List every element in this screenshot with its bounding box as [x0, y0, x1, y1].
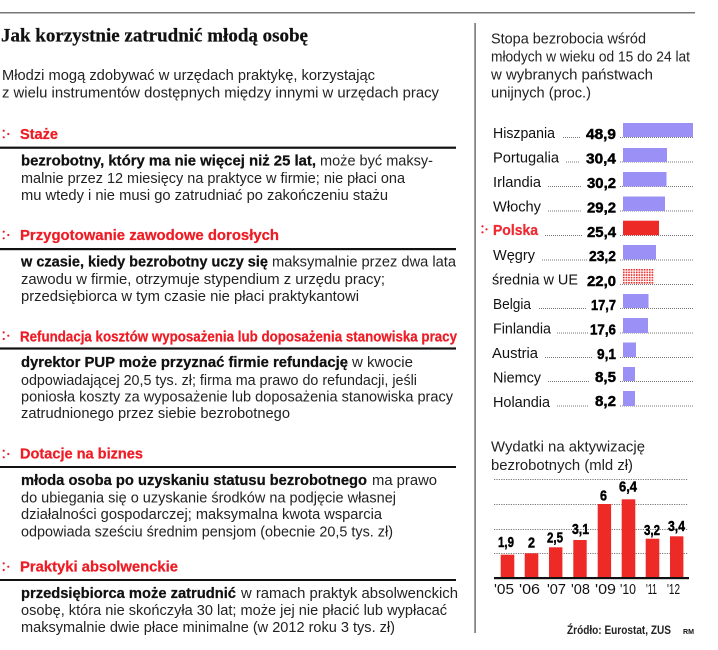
text block: Staże: malnie przez 12 miesięcy na praktyce w firmie; nie płaci ona [21, 171, 406, 187]
bar: 2007: 2,5 [547, 530, 563, 546]
row: średnia w UE [492, 269, 694, 290]
text block: Refundacja: poniosła koszty za wyposażenie lub doposażenia stanowiska pracy [21, 390, 454, 406]
intro text: z wielu instrumentów dostępnych między innymi w urzędach pracy [2, 86, 440, 102]
row: Polska: 25,4 [587, 225, 616, 241]
bar: 2011: 3,2 [644, 523, 660, 539]
text block: Dotacje: odpowiada sześciu średnim pensjom (obecnie 20,5 tys. zł) [21, 525, 393, 541]
intro text: Młodzi mogą zdobywać w urzędach praktykę, korzystając [2, 68, 375, 84]
row: Polska [481, 221, 694, 241]
bar: 2008 [571, 522, 590, 598]
panel: Staże [0, 126, 456, 204]
bar: 2010: 6,4 [619, 480, 637, 496]
bar: 2012: 3,4 [668, 519, 685, 535]
text block: Praktyki [21, 586, 458, 636]
row: Irlandia [493, 172, 694, 192]
text block: Dotacje: do ubiegania się o uzyskanie środków na podjęcie własnej [21, 491, 396, 507]
row: Hiszpania: Hiszpania [493, 125, 556, 142]
text block: Przygotowanie: maksymalnie przez dwa lata [272, 255, 457, 271]
bar: 2007 [547, 530, 566, 598]
bar: 2012: '12 [667, 582, 680, 598]
row: Irlandia: Irlandia [493, 174, 542, 191]
bar: 2005: '05 [494, 582, 514, 598]
icon: bullet Dotacje [3, 450, 9, 458]
row: Portugalia: Portugalia [493, 150, 560, 166]
heading: spending chart: bezrobotnych (mld zł) [491, 458, 633, 474]
row: Irlandia: 30,2 [587, 176, 616, 192]
text block: Przygotowanie: zawodu w firmie, otrzymuje stypendium z urzędu pracy; [21, 272, 385, 288]
heading: unemployment chart: unijnych (proc.) [491, 86, 591, 102]
text block: Refundacja [21, 355, 454, 422]
bar: 2006: '06 [519, 582, 540, 598]
bar chart: unemployment [481, 123, 694, 411]
row: Włochy [493, 196, 694, 216]
icon: bullet Praktyki [3, 562, 9, 571]
text block: Przygotowanie: w czasie, kiedy bezrobotny uczy się [20, 255, 268, 271]
row: Węgry: 23,2 [589, 249, 616, 265]
heading: spending chart: Wydatki na aktywizację [491, 440, 645, 456]
row: Niemcy: 8,5 [595, 370, 616, 386]
bar: 2009 [595, 489, 616, 598]
panel: Przygotowanie zawodowe dorosłych [0, 227, 457, 305]
row: Finlandia: 17,6 [590, 322, 616, 338]
text block: Przygotowanie: przedsiębiorca w tym czasie nie płaci praktykantowi [21, 289, 359, 305]
text block: Staże: może być maksy- [320, 154, 433, 170]
row: Belgia: Belgia [493, 296, 532, 313]
author initials: RM [683, 629, 694, 636]
bar: 2010 [619, 480, 637, 598]
text block: Praktyki: osobę, która nie skończyła 30 lat; może jej nie płacić lub wypłacać [21, 603, 447, 619]
panel: Dotacje na biznes [0, 446, 456, 541]
text block: Dotacje: działalności gospodarczej; maksymalna kwota wsparcia [21, 507, 383, 523]
heading: Staże: Staże [20, 126, 58, 143]
bar: 2008: '08 [571, 582, 590, 598]
icon: bullet Przygotowanie [3, 231, 9, 239]
icon: bullet Refundacja [3, 331, 9, 340]
row: Węgry: Węgry [493, 247, 535, 264]
row: Belgia [493, 294, 694, 314]
row: Niemcy [493, 367, 694, 386]
row: Austria [492, 342, 694, 363]
row: Hiszpania: 48,9 [586, 127, 616, 143]
intro text [2, 68, 440, 102]
heading: unemployment chart: Stopa bezrobocia wśród [491, 32, 646, 48]
row: Belgia: 17,7 [591, 298, 616, 314]
text block: Refundacja: odpowiadającej 20,5 tys. zł; firma ma prawo do refundacji, jeśli [21, 373, 417, 389]
bar: 2009: 6 [600, 489, 607, 505]
bar: 2005 [494, 535, 514, 598]
bar: 2005: 1,9 [498, 535, 514, 551]
source: Źródło: Eurostat, ZUS [567, 624, 671, 637]
heading: Przygotowanie zawodowe dorosłych: Przygotowanie zawodowe dorosłych [20, 227, 279, 244]
row: Niemcy: Niemcy [493, 370, 541, 386]
bar: 2006 [519, 536, 540, 598]
text block: Staże [21, 154, 433, 204]
heading: Dotacje na biznes: Dotacje na biznes [20, 446, 143, 462]
heading: unemployment chart: młodych w wieku od 15 do 24 lat [491, 50, 690, 66]
text block: Dotacje: młoda osoba po uzyskaniu statusu bezrobotnego [21, 473, 367, 489]
bar: 2011 [644, 523, 660, 598]
text block: Refundacja: w kwocie [351, 355, 413, 371]
bar: 2007: '07 [547, 582, 566, 598]
text block: Praktyki: w ramach praktyk absolwenckich [240, 586, 458, 602]
text block: Praktyki: przedsiębiorca może zatrudnić [21, 586, 236, 602]
row: Polska: Polska [493, 222, 539, 239]
heading: spending chart [491, 440, 645, 474]
text block: Refundacja: dyrektor PUP może przyznać firmie refundację [21, 355, 348, 371]
row: średnia w UE: średnia w UE [492, 272, 578, 288]
row: Włochy: 29,2 [587, 200, 616, 216]
bar: 2012 [667, 519, 685, 598]
text block: Praktyki: maksymalnie dwie płace minimalne (w 2012 roku 3 tys. zł) [21, 620, 395, 636]
row: Portugalia: 30,4 [586, 152, 616, 168]
bar: 2008: 3,1 [572, 522, 589, 538]
icon: bullet Staże [3, 130, 9, 138]
heading: Praktyki absolwenckie: Praktyki absolwenckie [20, 559, 178, 576]
panel: Praktyki absolwenckie [0, 559, 458, 636]
heading: unemployment chart [490, 32, 690, 102]
row: Hiszpania [493, 123, 694, 143]
bar chart: spending [494, 480, 689, 598]
row: Austria: Austria [492, 345, 539, 362]
row: średnia w UE: 22,0 [587, 274, 616, 290]
bar: 2010: '10 [620, 582, 636, 598]
heading: Refundacja kosztów: Refundacja kosztów wyposażenia lub doposażenia stanowiska pracy [20, 328, 458, 346]
row: Węgry [493, 245, 694, 265]
bar: 2011: '11 [646, 582, 657, 598]
text block: Dotacje: ma prawo [372, 473, 437, 489]
bar: 2009: '09 [595, 582, 616, 598]
text block: Dotacje [21, 473, 437, 541]
icon: bullet Polska [481, 225, 488, 233]
panel: Refundacja kosztów [0, 328, 458, 422]
text block: Staże: bezrobotny, który ma nie więcej niż 25 lat, [21, 154, 316, 170]
bar: 2006: 2 [528, 536, 535, 552]
row: Finlandia: Finlandia [493, 320, 552, 338]
title: Jak korzystnie zatrudnić młodą osobę [1, 26, 308, 47]
row: Austria: 9,1 [597, 347, 616, 363]
row: Finlandia [493, 318, 694, 338]
text block: Przygotowanie [20, 255, 457, 305]
heading: unemployment chart: w wybranych państwach [490, 68, 653, 84]
row: Holandia [493, 391, 694, 411]
text block: Staże: mu wtedy i nie musi go zatrudniać po zakończeniu stażu [21, 188, 388, 204]
row: Włochy: Włochy [493, 198, 541, 216]
text block: Refundacja: zatrudnionego przez siebie bezrobotnego [21, 406, 290, 422]
row: Holandia: Holandia [493, 394, 551, 411]
row: Holandia: 8,2 [595, 394, 616, 410]
row: Portugalia [493, 148, 694, 168]
